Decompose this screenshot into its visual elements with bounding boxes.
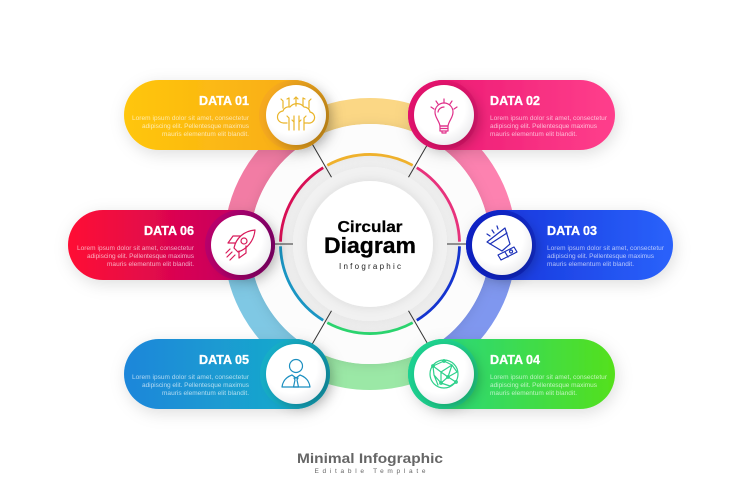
body text: adipiscing elit. Pellentesque maximus — [142, 123, 250, 130]
body text: mauris elementum elit blandit. — [490, 131, 577, 138]
body text: Lorem ipsum dolor sit amet, consectetur — [132, 115, 250, 122]
connector lines — [245, 136, 495, 352]
ring segment: bottom — [304, 359, 436, 377]
icon: light bulb — [431, 99, 457, 133]
badge — [414, 344, 474, 404]
icon: person — [282, 360, 310, 387]
panel: DATA 01 — [124, 80, 329, 150]
central white plate — [250, 124, 490, 364]
arc: crimson — [280, 168, 323, 242]
body text: Lorem ipsum dolor sit amet, consectetur — [547, 245, 665, 252]
body text — [490, 374, 608, 397]
body text: mauris elementum elit blandit. — [162, 131, 249, 138]
heading: DATA 05 — [199, 353, 249, 367]
body text: adipiscing elit. Pellentesque maximus — [87, 253, 195, 260]
footer title: Minimal Infographic — [297, 450, 443, 466]
badge ring — [260, 339, 330, 409]
footer subtitle: Editable Template — [314, 468, 426, 475]
centre disc — [293, 167, 447, 321]
ring segment: upper right — [436, 129, 503, 244]
pill — [408, 339, 615, 409]
panel: DATA 06 — [68, 210, 275, 280]
body text: mauris elementum elit blandit. — [547, 261, 634, 268]
icon: cloud network — [277, 97, 315, 130]
body text: adipiscing elit. Pellentesque maximus — [547, 253, 655, 260]
thin coloured ring — [280, 154, 460, 334]
heading: DATA 04 — [490, 353, 540, 367]
badge — [266, 344, 326, 404]
badge — [211, 215, 271, 275]
pill — [466, 210, 673, 280]
panel: DATA 03 — [466, 210, 673, 280]
arc: pink — [417, 168, 460, 242]
ring segment: upper left — [237, 129, 304, 244]
body text: adipiscing elit. Pellentesque maximus — [490, 382, 598, 389]
body text: adipiscing elit. Pellentesque maximus — [142, 382, 250, 389]
heading: DATA 06 — [144, 224, 194, 238]
pill — [124, 339, 330, 409]
centre title — [324, 219, 416, 271]
badge — [414, 85, 474, 145]
inner grey band — [280, 154, 460, 334]
body text — [547, 245, 665, 268]
badge — [266, 85, 326, 145]
footer title — [297, 450, 443, 475]
pill — [408, 80, 615, 150]
badge ring — [466, 210, 536, 280]
heading: DATA 03 — [547, 224, 597, 238]
arc: teal blue — [280, 246, 323, 320]
pill — [124, 80, 329, 150]
centre title: Infographic — [339, 262, 401, 271]
centre title: Circular — [338, 219, 402, 236]
icon: network globe — [430, 360, 458, 388]
body text — [490, 115, 608, 138]
icon: rocket — [226, 230, 255, 260]
body text: Lorem ipsum dolor sit amet, consectetur — [490, 374, 608, 381]
badge ring — [408, 80, 478, 150]
badge ring — [205, 210, 275, 280]
body text: Lorem ipsum dolor sit amet, consectetur — [77, 245, 195, 252]
body text: mauris elementum elit blandit. — [490, 390, 577, 397]
body text: adipiscing elit. Pellentesque maximus — [490, 123, 598, 130]
arc: blue — [417, 246, 460, 320]
outer pastel ring — [237, 111, 503, 377]
body text: Lorem ipsum dolor sit amet, consectetur — [132, 374, 250, 381]
body text — [132, 115, 250, 138]
white disc — [307, 181, 433, 307]
body text: mauris elementum elit blandit. — [162, 390, 249, 397]
arc: amber — [327, 154, 413, 165]
badge — [472, 215, 532, 275]
body text — [77, 245, 195, 268]
badge ring — [408, 339, 478, 409]
panel: DATA 04 — [408, 339, 615, 409]
panel: DATA 02 — [408, 80, 615, 150]
heading: DATA 02 — [490, 94, 540, 108]
heading: DATA 01 — [199, 94, 249, 108]
body text — [132, 374, 250, 397]
pill — [68, 210, 275, 280]
ring segment: top — [304, 111, 436, 129]
grey disc — [293, 167, 447, 321]
panel: DATA 05 — [124, 339, 330, 409]
badge ring — [259, 80, 329, 150]
arc: green — [327, 323, 413, 334]
ring segment: lower left — [237, 244, 304, 359]
icon: megaphone — [487, 226, 517, 260]
centre title: Diagram — [324, 233, 416, 258]
body text: mauris elementum elit blandit. — [107, 261, 194, 268]
ring segment: lower right — [436, 244, 503, 359]
body text: Lorem ipsum dolor sit amet, consectetur — [490, 115, 608, 122]
